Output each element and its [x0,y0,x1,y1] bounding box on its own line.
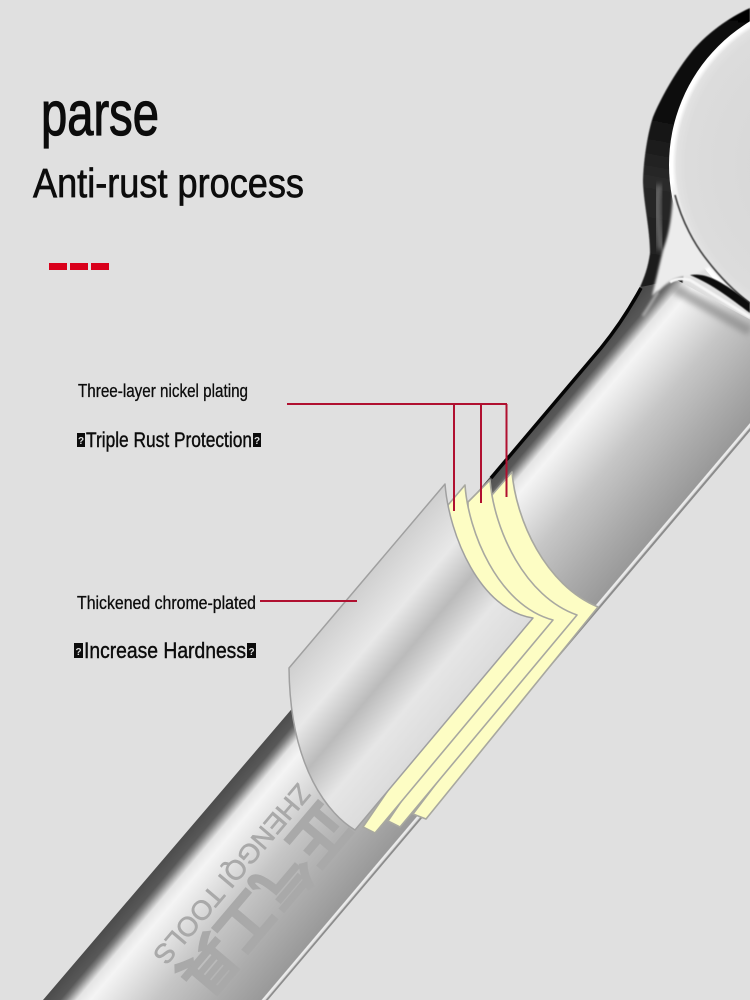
handle face top edge [670,279,750,317]
nickel layer 3 [413,472,598,819]
chrome leader line [260,600,357,602]
chrome label: Thickened chrome-plated [77,593,256,613]
chrome layer [289,484,533,830]
nickel label: Three-layer nickel plating [78,381,248,401]
nickel benefit: Triple Rust Protection [86,428,252,452]
title: parse: parse [41,80,159,149]
chrome benefit: ? [75,647,82,658]
callout: nickel plating [77,381,507,511]
wrench head [640,0,750,333]
chrome benefit: Increase Hardness [84,638,246,663]
head inner rim shadow [675,195,750,303]
chrome benefit: ? [248,647,255,658]
nickel layer 2 [388,480,577,827]
handle black edge [491,288,641,478]
nickel layer 1 [363,485,553,833]
wrench handle [43,280,750,1000]
black wedge under head [690,275,750,313]
subtitle: anti-rust process: Anti-rust process [33,160,304,206]
nickel leader lines [287,404,507,511]
red dash accent [49,263,109,270]
handle logo [154,782,347,990]
neck highlight [652,180,712,296]
nickel benefit: ? [78,436,84,447]
callout: chrome plating [74,593,357,663]
nickel benefit: ? [254,436,260,447]
brand name latin: ZHENGQI TOOLS [147,778,316,970]
neck highlight tail [643,292,658,316]
